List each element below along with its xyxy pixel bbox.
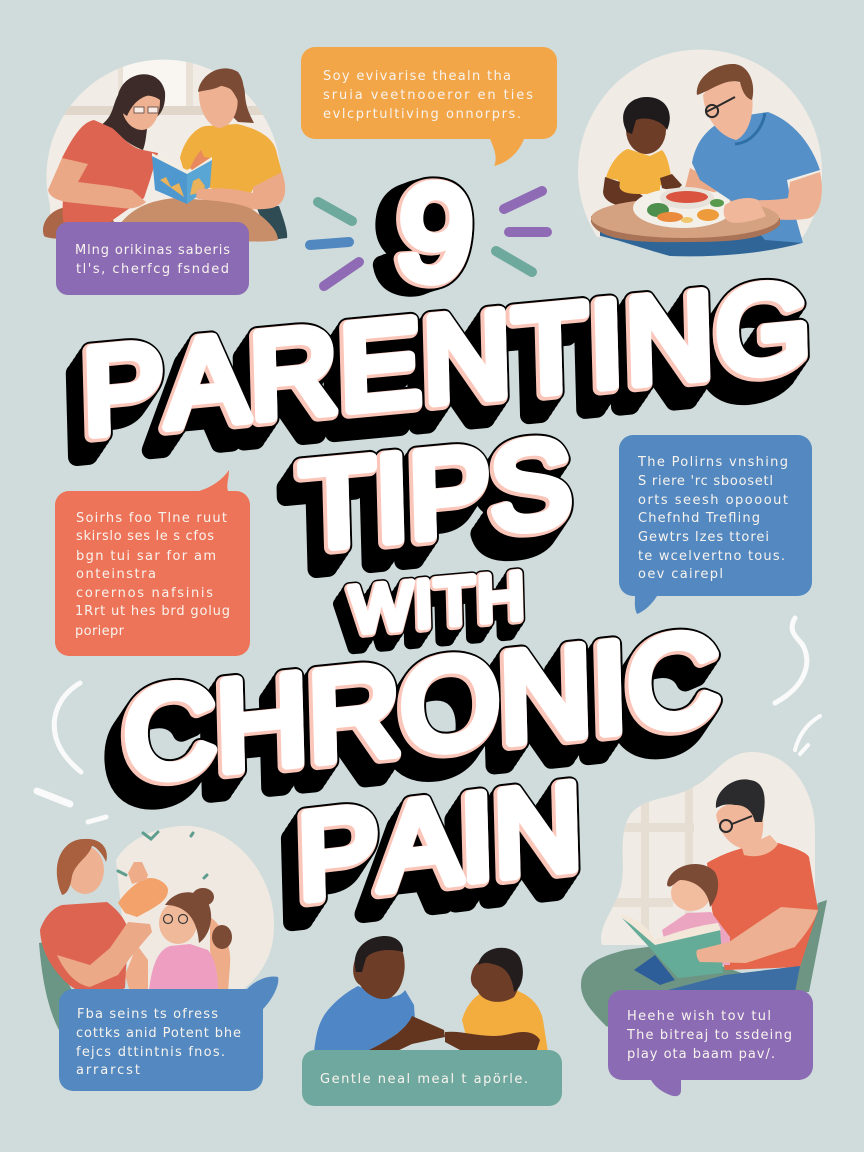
fringe xyxy=(198,68,244,106)
table top xyxy=(591,198,779,238)
face xyxy=(66,846,104,894)
backdrop blob xyxy=(601,752,815,945)
hair xyxy=(165,892,211,943)
shirt xyxy=(462,990,548,1052)
word CHRONIC: CHRONIC xyxy=(114,616,714,819)
bubble text xyxy=(637,455,788,582)
page art xyxy=(160,177,205,197)
callout: blue speech bubble bottom left xyxy=(59,977,278,1091)
hair strand over shirt xyxy=(112,122,143,150)
armchair xyxy=(581,900,827,1027)
puppet body xyxy=(118,878,168,917)
glasses xyxy=(720,816,752,832)
bubble text: play ota baam pav/. xyxy=(627,1047,775,1062)
glasses xyxy=(164,914,188,924)
accent bars right of the nine xyxy=(496,191,547,272)
numeral nine: 9 xyxy=(390,154,480,312)
shirt xyxy=(314,986,415,1052)
seated legs xyxy=(43,208,120,239)
orange food xyxy=(657,212,683,222)
glasses xyxy=(134,107,158,113)
word WITH: WITH xyxy=(347,562,525,651)
face xyxy=(353,943,405,999)
face xyxy=(199,86,238,128)
adult xyxy=(40,839,152,997)
word PARENTING: PARENTING xyxy=(81,256,815,460)
left page xyxy=(152,156,187,204)
dad xyxy=(707,779,818,970)
arm xyxy=(57,922,152,987)
collar xyxy=(735,113,765,144)
bubble text: Fba seins ts ofress xyxy=(77,1007,218,1022)
hair xyxy=(697,64,753,100)
word TIPS: TIPS xyxy=(291,423,565,585)
glasses xyxy=(706,97,735,117)
word PARENTING: PARENTING xyxy=(70,270,804,475)
illustration: parent and child reading a book xyxy=(43,55,287,242)
book xyxy=(152,150,212,204)
word PARENTING: PARENTING xyxy=(65,279,798,483)
word WITH: WITH xyxy=(348,559,527,648)
word CHRONIC: CHRONIC xyxy=(108,625,708,827)
lap and wooden table xyxy=(120,198,278,242)
arm xyxy=(445,1032,540,1056)
word PAIN: PAIN xyxy=(291,762,579,931)
callout: teal caption xyxy=(302,1050,562,1106)
ponytail xyxy=(212,925,232,949)
arm xyxy=(365,1016,445,1052)
word PARENTING: PARENTING xyxy=(73,266,807,471)
trousers xyxy=(660,966,800,992)
white squiggle right xyxy=(775,618,820,754)
arm xyxy=(48,158,146,209)
red food xyxy=(666,191,708,203)
chair xyxy=(39,942,75,1032)
word TIPS: TIPS xyxy=(297,414,571,576)
hair back xyxy=(212,71,254,123)
puppet hand xyxy=(128,862,148,884)
bubble text: The Polirns vnshing xyxy=(637,455,788,470)
bubble xyxy=(608,990,813,1096)
window panes xyxy=(613,780,694,940)
word CHRONIC: CHRONIC xyxy=(120,608,720,810)
callout: purple caption top left xyxy=(56,222,249,295)
callout: orange speech bubble xyxy=(301,47,557,166)
word TIPS: TIPS xyxy=(288,427,563,589)
bubble text: Soy evivarise thealn tha xyxy=(323,69,511,84)
shirt xyxy=(707,843,818,970)
child xyxy=(662,864,730,965)
bubble text xyxy=(626,1009,792,1062)
man xyxy=(685,64,822,243)
man's hand xyxy=(724,198,766,223)
word CHRONIC: CHRONIC xyxy=(120,608,720,810)
bubble text: oev cairepl xyxy=(638,567,723,582)
bubble text: skirslo ses le s cfos xyxy=(76,529,214,544)
person in yellow xyxy=(180,68,285,209)
hair xyxy=(355,936,403,972)
bubble text: te wcelvertno tous. xyxy=(638,549,785,564)
greens xyxy=(647,203,669,217)
numeral nine: 9 xyxy=(373,159,464,317)
illustration: parent with puppet and child xyxy=(39,826,274,1032)
backdrop circle xyxy=(578,50,822,237)
child arm xyxy=(603,177,646,208)
bubble text: cottks anid Potent bhe xyxy=(76,1026,241,1041)
bubble text: 1Rrt ut hes brd golug xyxy=(75,604,230,619)
book xyxy=(620,915,723,978)
bubble text xyxy=(76,1007,241,1078)
word CHRONIC: CHRONIC xyxy=(106,629,705,831)
hand xyxy=(196,188,214,199)
bubble text: bgn tui sar for am xyxy=(76,549,216,564)
right boy xyxy=(445,948,548,1056)
bubble text: arrarcst xyxy=(76,1063,140,1078)
shirt xyxy=(180,124,282,195)
white squiggle left xyxy=(37,683,106,822)
shirt xyxy=(149,944,218,990)
plate xyxy=(633,188,733,228)
bubble text: The bitreaj to ssdeing xyxy=(626,1028,792,1043)
word CHRONIC: CHRONIC xyxy=(111,621,711,823)
bubble text: S riere 'rc sboosetl xyxy=(638,474,773,489)
numeral nine: 9 xyxy=(383,156,473,314)
bubble xyxy=(301,47,557,166)
right page xyxy=(187,160,212,204)
word PAIN: PAIN xyxy=(285,771,573,940)
face xyxy=(716,803,763,850)
numeral nine: 9 xyxy=(378,158,468,316)
illustration: father and child at a meal xyxy=(578,50,822,256)
bubble text: evlcprtultiving onnorprs. xyxy=(323,107,521,122)
shirt xyxy=(62,120,158,224)
numeral nine: 9 xyxy=(369,161,460,319)
word PAIN: PAIN xyxy=(296,756,584,925)
hair xyxy=(478,948,523,992)
hair xyxy=(667,864,718,907)
word PAIN: PAIN xyxy=(294,758,582,927)
bubble text: Gewtrs lzes ttorei xyxy=(638,530,769,545)
hair xyxy=(100,74,165,150)
title xyxy=(64,152,815,949)
table edge xyxy=(591,216,780,242)
callout: blue speech bubble right xyxy=(619,435,812,614)
word TIPS: TIPS xyxy=(283,435,557,597)
word PARENTING: PARENTING xyxy=(76,262,810,466)
word PARENTING: PARENTING xyxy=(79,257,813,462)
illustration: two boys talking xyxy=(314,936,548,1056)
bubble text: corernos nafsinis xyxy=(76,586,213,601)
word CHRONIC: CHRONIC xyxy=(122,606,722,808)
word WITH: WITH xyxy=(339,574,517,663)
bun xyxy=(192,888,214,906)
word WITH: WITH xyxy=(344,566,522,655)
word WITH: WITH xyxy=(349,558,528,647)
bubble xyxy=(619,435,812,614)
child hair xyxy=(623,97,670,134)
caption text: Mlng orikinas saberis xyxy=(75,243,230,258)
adult's second arm and strap xyxy=(125,945,148,992)
caption text xyxy=(75,243,230,277)
bubble xyxy=(55,470,250,656)
backdrop blob xyxy=(116,826,274,992)
head xyxy=(703,81,753,140)
dad's forearm and hand xyxy=(696,907,818,963)
shirt xyxy=(40,902,128,997)
bowl xyxy=(660,187,714,209)
word PARENTING: PARENTING xyxy=(79,257,813,462)
word TIPS: TIPS xyxy=(297,414,571,576)
arm back xyxy=(685,168,720,196)
caption text: Gentle neal meal t apörle. xyxy=(320,1072,528,1087)
word PAIN: PAIN xyxy=(288,767,576,936)
bubble text: orts seesh opooout xyxy=(638,493,788,508)
bubble text: Heehe wish tov tul xyxy=(627,1009,771,1024)
caption text: tl's, cherfcg fsnded xyxy=(76,262,229,277)
word PARENTING: PARENTING xyxy=(68,275,801,479)
face xyxy=(122,95,160,130)
callout: coral speech bubble xyxy=(55,470,250,656)
child's far arm xyxy=(210,917,230,992)
bubble text xyxy=(75,511,230,639)
legs under table xyxy=(600,225,802,256)
book pages edge xyxy=(152,153,212,175)
plate of food xyxy=(633,187,733,228)
accent bars left of the nine xyxy=(310,202,359,286)
illustration: father reading to child xyxy=(581,752,827,1027)
word PAIN: PAIN xyxy=(280,780,567,949)
left boy xyxy=(314,936,445,1052)
child xyxy=(603,97,682,208)
window xyxy=(64,60,263,115)
box xyxy=(56,222,249,295)
bubble xyxy=(59,977,278,1091)
face xyxy=(671,875,711,911)
word TIPS: TIPS xyxy=(286,431,560,593)
word PAIN: PAIN xyxy=(294,758,582,927)
neck xyxy=(742,835,778,856)
person in red xyxy=(48,74,165,224)
puppet xyxy=(118,862,168,917)
bubble text: onteinstra xyxy=(76,567,156,582)
face xyxy=(471,956,520,1002)
hair xyxy=(716,779,765,822)
forearm xyxy=(721,172,822,224)
word TIPS: TIPS xyxy=(299,412,573,574)
dark trousers xyxy=(256,206,287,240)
callout: purple speech bubble bottom right xyxy=(608,990,813,1096)
bubble text: poriepr xyxy=(75,624,125,639)
child head xyxy=(626,106,666,154)
fringe xyxy=(118,85,165,116)
word PAIN: PAIN xyxy=(283,775,570,944)
box xyxy=(302,1050,562,1106)
word WITH: WITH xyxy=(341,570,519,660)
pink shirt xyxy=(662,912,730,965)
hair xyxy=(57,839,107,895)
shirt xyxy=(692,112,820,243)
book pages xyxy=(620,915,721,945)
child shirt xyxy=(606,149,671,194)
bubble text: sruia veetnooeror en ties xyxy=(323,88,533,103)
child xyxy=(149,888,232,990)
numeral nine: 9 xyxy=(388,155,478,313)
word WITH: WITH xyxy=(348,559,527,648)
scene backdrop circle xyxy=(47,60,281,238)
word CHRONIC: CHRONIC xyxy=(117,612,717,814)
bubble text: Chefnhd Trefling xyxy=(638,511,760,526)
table xyxy=(591,198,780,242)
child's knee xyxy=(634,955,675,985)
book cover xyxy=(622,918,723,978)
flame accent xyxy=(190,150,210,170)
bubble text: Soirhs foo Tlne ruut xyxy=(76,511,227,526)
word TIPS: TIPS xyxy=(294,418,568,580)
arm xyxy=(200,172,285,209)
teal ticks xyxy=(118,832,207,878)
numeral nine: 9 xyxy=(388,155,478,313)
bubble text: fejcs dttintnis fnos. xyxy=(76,1045,225,1060)
face xyxy=(159,902,197,944)
bubble text xyxy=(323,69,533,122)
